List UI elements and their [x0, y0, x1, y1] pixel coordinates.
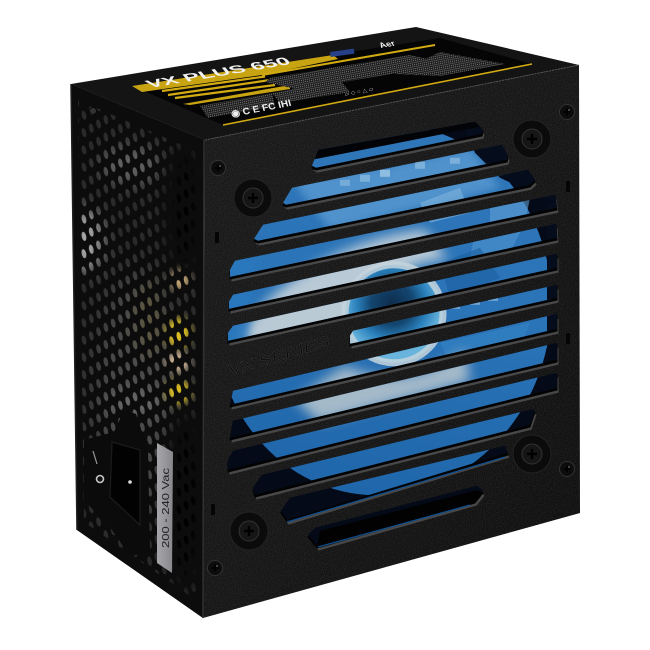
- product illustration: power supply unit: [70, 27, 580, 618]
- fan hub ring: [345, 265, 443, 363]
- side vertical edge: [71, 84, 77, 530]
- panel: perforated side face: [70, 84, 205, 618]
- voltage label: 200 - 240 Vac: [161, 468, 172, 548]
- large screw bottom left: [230, 512, 268, 550]
- mounting notches: [211, 181, 570, 515]
- fan seen through slots: [228, 122, 557, 546]
- grille slots: [228, 124, 557, 548]
- side perforated plate: [71, 84, 205, 618]
- panel: top face: [71, 27, 579, 140]
- dark top right corner of fan housing: [474, 150, 510, 182]
- LED dots: [340, 158, 498, 309]
- label model name: VX PLUS 650: [143, 55, 295, 90]
- large screw top right: [513, 120, 551, 158]
- power inlet assembly: [84, 410, 173, 573]
- small screw bottom left: [208, 560, 222, 576]
- label certification marks: ◉ C E FC IHI: [230, 98, 293, 120]
- white upper blade: [238, 230, 448, 348]
- dark upper half of first slot: [314, 122, 480, 160]
- front left edge: [203, 140, 204, 618]
- top label: [132, 38, 532, 125]
- socket pin: [128, 480, 132, 484]
- top label: ▱ ◇ ○ △ ▱: [344, 87, 375, 98]
- dark housing right columns: [547, 224, 554, 331]
- blue blade tips: [228, 256, 259, 341]
- blade facets: [290, 148, 530, 363]
- label rating logo: [330, 49, 354, 57]
- large screw bottom right: [513, 435, 551, 473]
- engraved series mark: VX SERIES: [228, 333, 330, 380]
- small screw top right: [560, 104, 574, 120]
- white lower blade: [295, 350, 470, 423]
- rocker switch: [93, 451, 97, 464]
- panel: front fan grille: [202, 64, 580, 618]
- front top edge highlight: [205, 65, 579, 140]
- large screw top left: [234, 179, 272, 217]
- small screw bottom right: [560, 462, 574, 476]
- side screw holes: [90, 108, 96, 114]
- power indicator ring: [96, 476, 104, 482]
- fan disc: [228, 130, 552, 495]
- fan hub: [345, 265, 443, 363]
- voltage label: [157, 443, 173, 573]
- grille rim highlights: [230, 127, 558, 551]
- small screw top left: [210, 160, 226, 176]
- label brand logo: Aer: [377, 39, 398, 50]
- slot bottom dark lips: [317, 490, 483, 548]
- power socket: [110, 442, 140, 525]
